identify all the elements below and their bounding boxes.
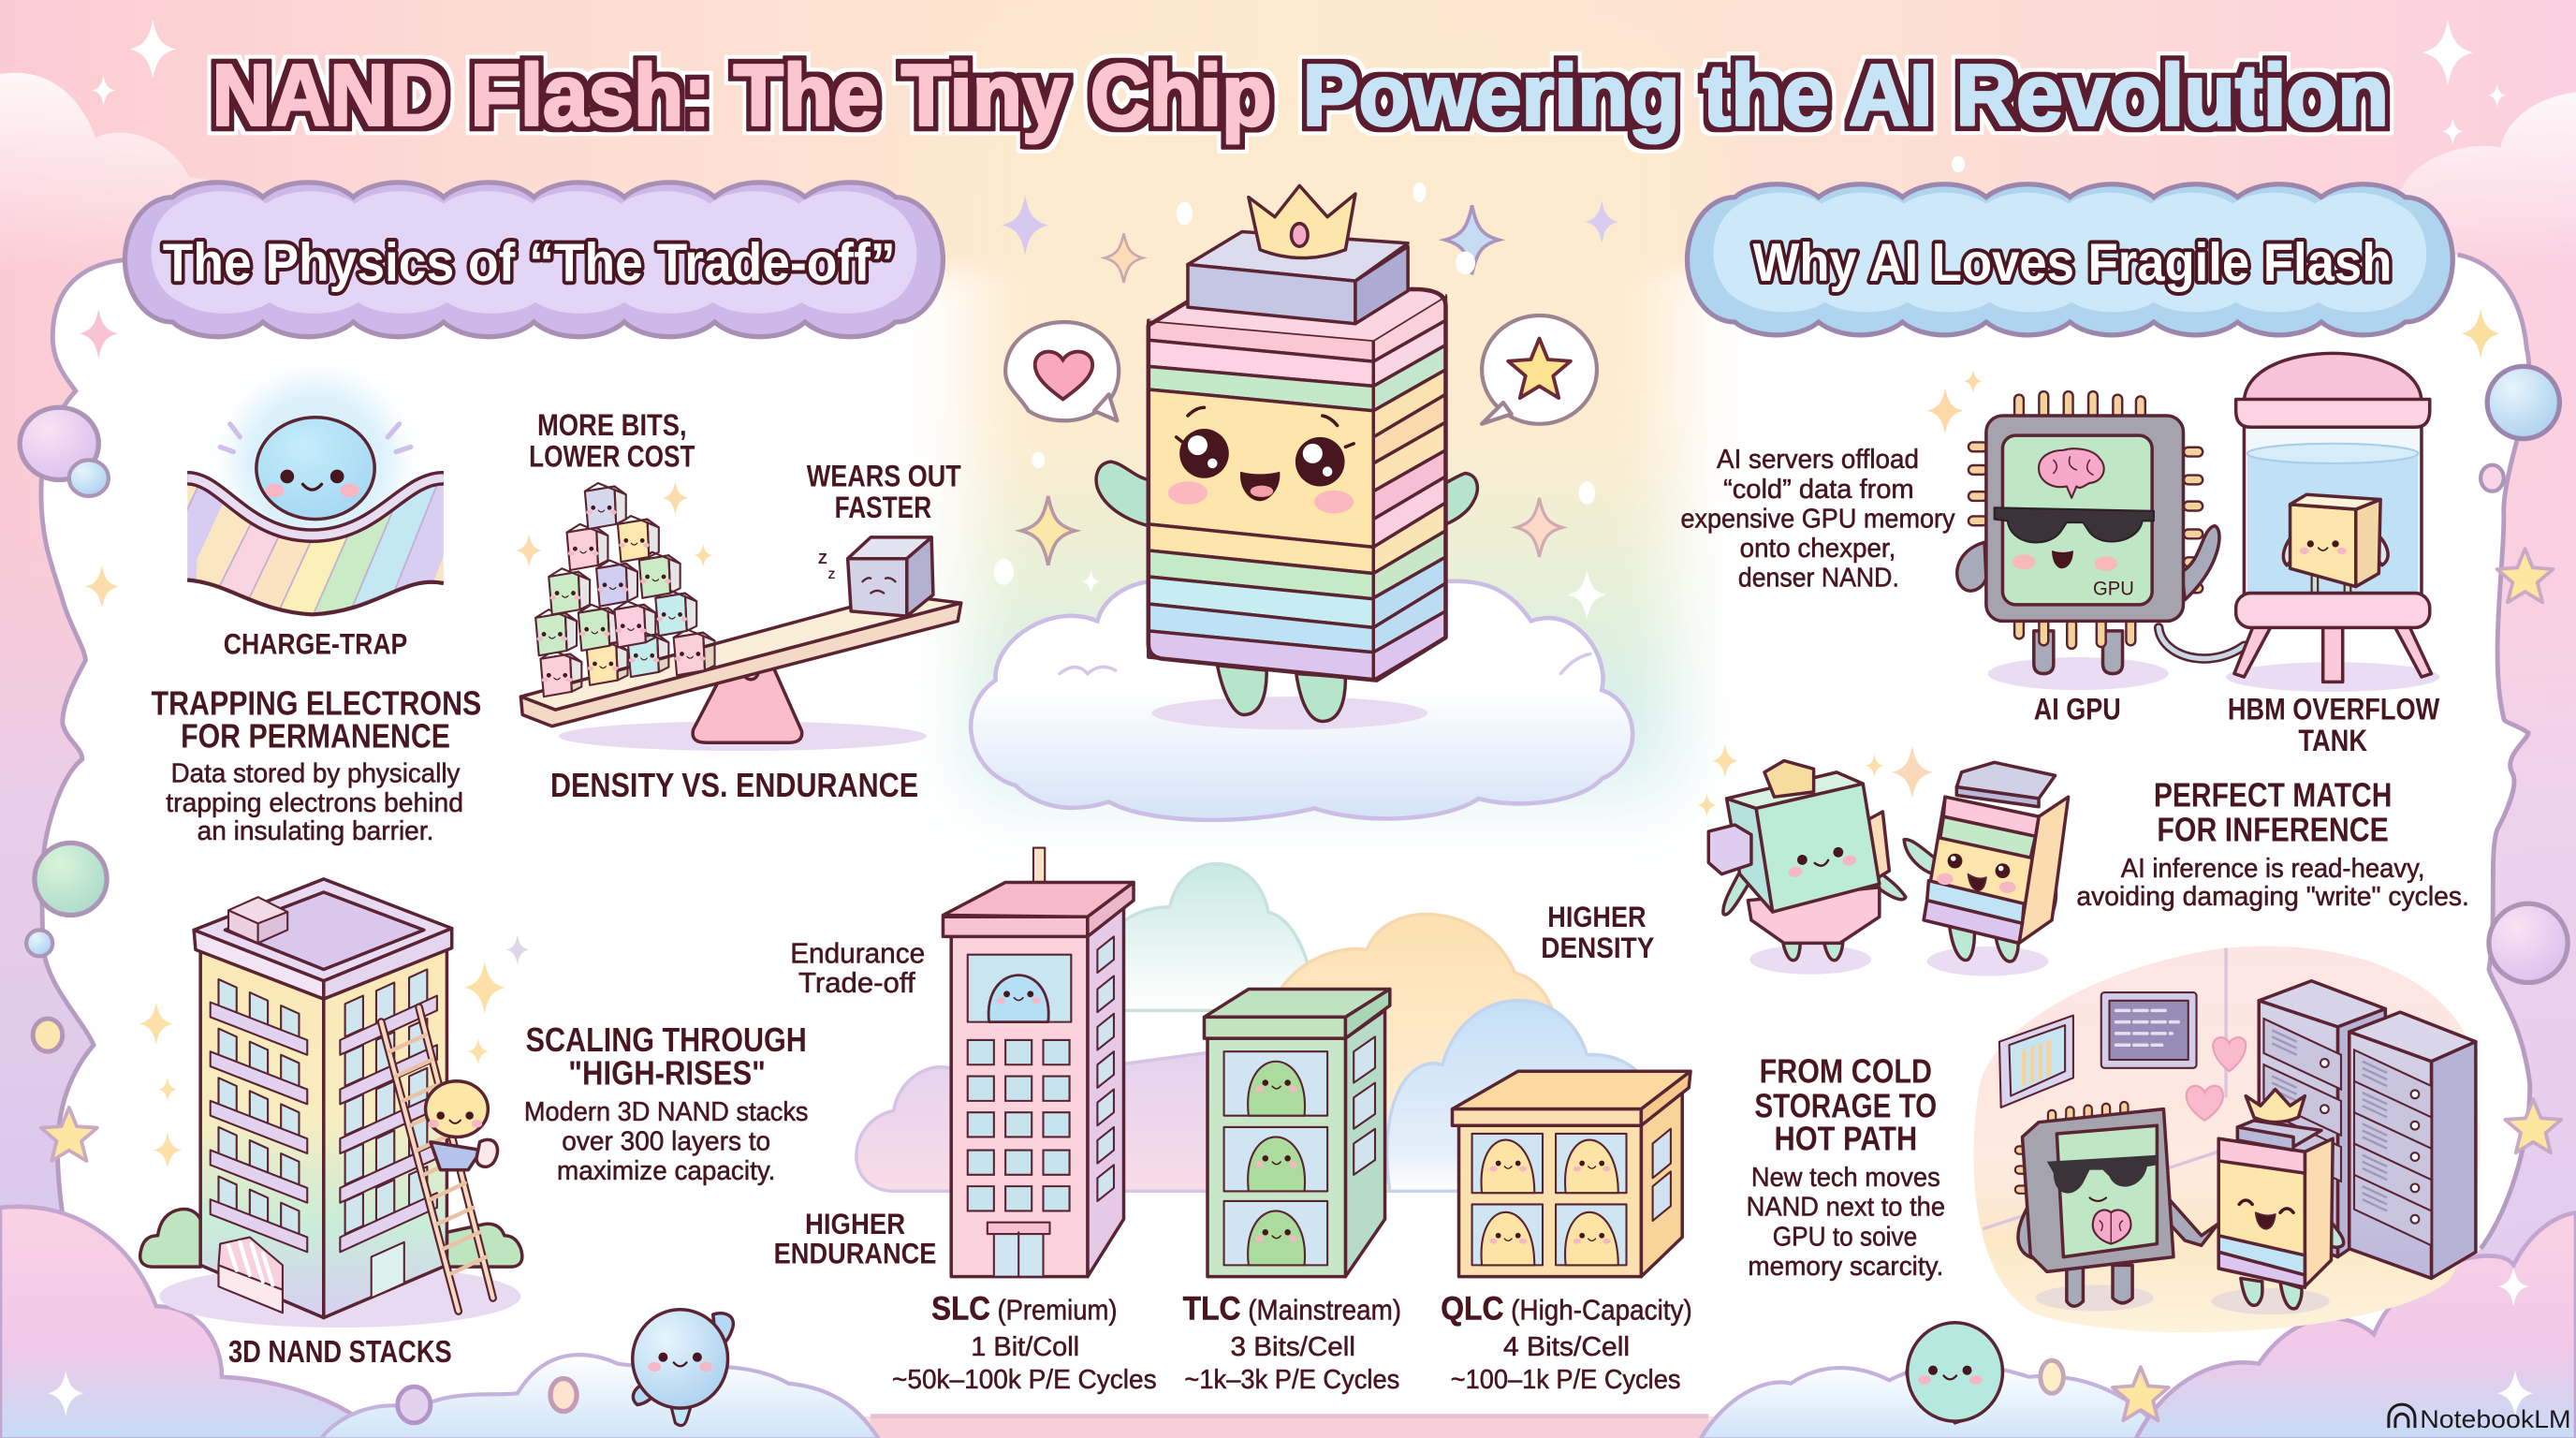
mascot cap: [1188, 231, 1408, 324]
bubbles along the border: [20, 366, 2568, 1423]
blue chibi creature: [633, 1310, 733, 1426]
text: trapping electrons: [152, 683, 481, 846]
SLC large window with chibi: [968, 955, 1071, 1022]
tank legs: [2234, 624, 2431, 682]
text: SLC spec: [892, 1290, 1157, 1395]
small GPU: [2018, 1106, 2217, 1312]
mascot outline: [1149, 289, 1445, 681]
text: HBM overflow tank: HBM OVERFLOW: [2228, 693, 2440, 726]
clouds behind towers: [856, 864, 1676, 1191]
text: AI servers offload: “cold” data from: [1723, 475, 1914, 505]
cable between GPU and tank: [2159, 627, 2244, 659]
text: higher endurance: ENDURANCE: [774, 1237, 936, 1270]
tower: SLC: [943, 848, 1134, 1277]
lower stack: [1748, 888, 1880, 943]
text: higher endurance: HIGHER: [805, 1207, 905, 1240]
text: QLC spec: [1441, 1290, 1692, 1395]
mascot: NAND chip character: [1096, 185, 1477, 729]
mascot top face: [1149, 289, 1445, 340]
HBM overflow tank: [2226, 353, 2439, 692]
text: scaling through high-rises: [524, 1020, 809, 1186]
tired cube: Z: [828, 568, 836, 581]
roof penthouse: [228, 897, 287, 943]
left lavender block: [1708, 825, 1751, 874]
text: wears out: [807, 459, 961, 524]
TLC side windows: [1354, 1036, 1375, 1175]
GPU sunglasses: [1995, 507, 2154, 542]
text: scaling through high-rises: maximize capacity.: [557, 1156, 775, 1186]
text: from cold storage: NAND next to the: [1747, 1193, 1945, 1223]
cloud: bottom left: [0, 1207, 381, 1438]
tired cube: Z: [818, 551, 827, 567]
tank water: [2247, 444, 2418, 600]
roof: [194, 879, 452, 999]
text: wears out: FASTER: [835, 491, 931, 524]
mascot side stripes: [1373, 296, 1445, 681]
text: scaling through high-rises: over 300 layers to: [562, 1127, 770, 1157]
white content panel: [41, 255, 2530, 1416]
text: from cold storage: GPU to soive: [1773, 1222, 1917, 1252]
text: higher endurance: [774, 1207, 936, 1270]
mascot shadow: [1151, 697, 1427, 729]
seesaw fulcrum: [693, 647, 802, 742]
AI GPU character: [1957, 396, 2219, 690]
main block side: [1727, 799, 1773, 912]
text: HBM overflow tank: [2228, 693, 2440, 757]
text: charge-trap label: CHARGE-TRAP: [224, 627, 407, 661]
tank glass: [2244, 419, 2422, 603]
mascot arms: [1096, 462, 1477, 531]
speech bubble: star: [1482, 315, 1597, 424]
tank dome: [2236, 353, 2430, 427]
GPU brain: [2039, 448, 2104, 498]
text: density vs endurance: DENSITY VS. ENDURANCE: [550, 766, 918, 804]
QLC side windows: [1653, 1129, 1671, 1221]
heading pill: why AI: [1687, 184, 2452, 335]
text: wears out: WEARS OUT: [807, 459, 961, 492]
text: TLC spec: 3 Bits/Cell: [1231, 1332, 1355, 1362]
text: AI GPU: AI GPU: [2034, 693, 2121, 726]
friends: HBM block character: [1708, 761, 1906, 975]
text: from cold storage: [1747, 1052, 1945, 1282]
text: QLC spec: ~100–1k P/E Cycles: [1451, 1365, 1680, 1395]
tired cube: [818, 537, 933, 616]
NotebookLM wordmark: NotebookLM: [2420, 1404, 2571, 1433]
server room scene: [1973, 946, 2480, 1332]
text: endurance trade-off: Trade-off: [798, 966, 915, 999]
text: SLC spec: ~50k–100k P/E Cycles: [892, 1365, 1157, 1395]
cloud: bottom centre-left: [320, 1355, 879, 1438]
block arms: [1723, 862, 1906, 915]
text: AI servers offload: expensive GPU memory: [1680, 504, 1955, 534]
mascot crown: [1249, 185, 1355, 258]
striped wave: [187, 485, 444, 612]
text: trapping electrons: Data stored by physically: [171, 758, 461, 788]
hearts: [2187, 1037, 2246, 1121]
text: more bits: [529, 408, 695, 473]
text: scaling through high-rises: Modern 3D NAND stacks: [524, 1097, 809, 1127]
cloud: bottom right: [2136, 1212, 2576, 1438]
text: 3D NAND stacks: 3D NAND STACKS: [228, 1335, 452, 1370]
text: endurance trade-off: Endurance: [790, 936, 925, 969]
text: HBM overflow tank: TANK: [2298, 724, 2368, 757]
text: trapping electrons: FOR PERMANENCE: [181, 717, 450, 756]
text: endurance trade-off: [790, 936, 925, 999]
text: TLC spec: TLC (Mainstream): [1183, 1290, 1401, 1327]
SLC side windows and door: [988, 936, 1114, 1277]
central glow behind mascot: [900, 66, 1721, 797]
mascot front stripes: [1149, 320, 1373, 681]
QLC rooms with chibis: [1472, 1134, 1627, 1265]
wall monitor: [2101, 992, 2197, 1068]
arms: [1904, 840, 2056, 917]
bottom strip: [871, 1419, 1708, 1438]
tank base: [2236, 594, 2430, 627]
text: perfect match: [2076, 776, 2469, 912]
text: AI servers offload: AI servers offload: [1717, 445, 1919, 475]
tank chibi: [2283, 494, 2388, 601]
teal chibi creature: [1907, 1323, 2002, 1423]
GPU smile and cheeks: [2012, 550, 2117, 571]
text: more bits: MORE BITS,: [537, 408, 687, 442]
3D NAND building: [140, 879, 522, 1328]
charge-trap illustration: [187, 372, 444, 616]
heading pill: why AI: Why AI Loves Fragile Flash: [1753, 233, 2392, 293]
text: perfect match: FOR INFERENCE: [2157, 811, 2389, 849]
heading pill: physics: The Physics of “The Trade-off”: [163, 233, 896, 293]
text: AI servers offload: [1680, 445, 1955, 594]
text: perfect match: AI inference is read-heavy,: [2121, 854, 2424, 884]
seesaw: density vs endurance: [520, 483, 961, 751]
cloud: bottom centre-right: [1701, 1364, 2169, 1438]
server rack back: [2259, 981, 2385, 1257]
text: trapping electrons: an insulating barrier.: [198, 816, 433, 846]
text: scaling through high-rises: "HIGH-RISES": [568, 1053, 766, 1092]
floors left: [211, 979, 307, 1252]
text: trapping electrons: TRAPPING ELECTRONS: [152, 683, 481, 722]
NotebookLM logo mark: [2389, 1404, 2415, 1428]
speech bubble: heart: [1005, 322, 1119, 420]
text: QLC spec: QLC (High-Capacity): [1441, 1290, 1692, 1327]
ladder: [381, 1007, 493, 1312]
text: scaling through high-rises: SCALING THROUGH: [526, 1020, 807, 1059]
GPU body: [1986, 416, 2183, 621]
title: [212, 46, 2389, 143]
front: [1924, 797, 2039, 943]
block legs: [1781, 930, 1843, 961]
room background: [1973, 946, 2480, 1332]
face: [1948, 854, 1962, 869]
tower: QLC: [1453, 1071, 1690, 1277]
GPU pins: [1973, 396, 2198, 644]
text: AI servers offload: denser NAND.: [1738, 564, 1899, 594]
server rack front: [2349, 1012, 2476, 1278]
friends: NAND character: [1904, 762, 2069, 976]
top yellow block: [1764, 761, 1814, 797]
GPU arms: [1957, 526, 2219, 600]
GPU label: GPU: [2093, 578, 2134, 599]
electron: [256, 418, 374, 520]
floors right: [340, 969, 437, 1252]
text: perfect match: PERFECT MATCH: [2154, 776, 2392, 814]
main block front: [1756, 784, 1880, 912]
text: more bits: LOWER COST: [529, 439, 695, 473]
shop and door: [218, 1238, 404, 1313]
tower: TLC: [1204, 990, 1390, 1277]
title: Powering the AI Revolution: [1303, 46, 2389, 143]
side: [2019, 797, 2069, 943]
legs: [1949, 917, 2018, 961]
SLC windows: [968, 1040, 1070, 1211]
text: trapping electrons: trapping electrons behind: [166, 788, 463, 818]
text: SLC spec: 1 Bit/Coll: [971, 1332, 1079, 1362]
title: NAND Flash: The Tiny Chip: [212, 46, 1271, 143]
climbing chibi: [426, 1081, 498, 1170]
GPU legs: [2034, 631, 2123, 674]
text: from cold storage: STORAGE TO: [1754, 1086, 1937, 1124]
text: from cold storage: memory scarcity.: [1748, 1252, 1943, 1282]
text: higher density: [1541, 900, 1654, 964]
main block top: [1727, 772, 1863, 808]
text: SLC spec: SLC (Premium): [931, 1290, 1117, 1327]
bushes: [140, 1209, 522, 1267]
building walls: [200, 949, 446, 1318]
text: AI servers offload: onto chexper,: [1740, 534, 1895, 564]
mascot face: [1168, 407, 1354, 513]
seesaw plank: [520, 594, 961, 726]
central cloud: [971, 581, 1632, 820]
wall panel: [1999, 1016, 2073, 1108]
text: from cold storage: FROM COLD: [1760, 1052, 1932, 1091]
panel outlines: [41, 255, 2530, 1416]
text: QLC spec: 4 Bits/Cell: [1503, 1332, 1630, 1362]
text: perfect match: avoiding damaging "write" cycles.: [2076, 882, 2469, 912]
stacked cubes: [535, 483, 714, 697]
heading pill: physics: [124, 183, 943, 337]
text: from cold storage: HOT PATH: [1774, 1120, 1917, 1158]
text: higher density: DENSITY: [1541, 931, 1654, 964]
TLC rooms with chibis: [1224, 1051, 1327, 1265]
cap: [1956, 762, 2056, 799]
GPU screen: [2002, 435, 2152, 605]
right peach block: [1865, 812, 1889, 881]
cable highlight: [2159, 627, 2244, 659]
mascot legs: [1218, 666, 1345, 721]
text: from cold storage: New tech moves: [1751, 1163, 1940, 1193]
text: TLC spec: [1183, 1290, 1401, 1395]
small NAND: [2211, 1090, 2344, 1314]
text: TLC spec: ~1k–3k P/E Cycles: [1184, 1365, 1399, 1395]
text: higher density: HIGHER: [1547, 900, 1647, 933]
